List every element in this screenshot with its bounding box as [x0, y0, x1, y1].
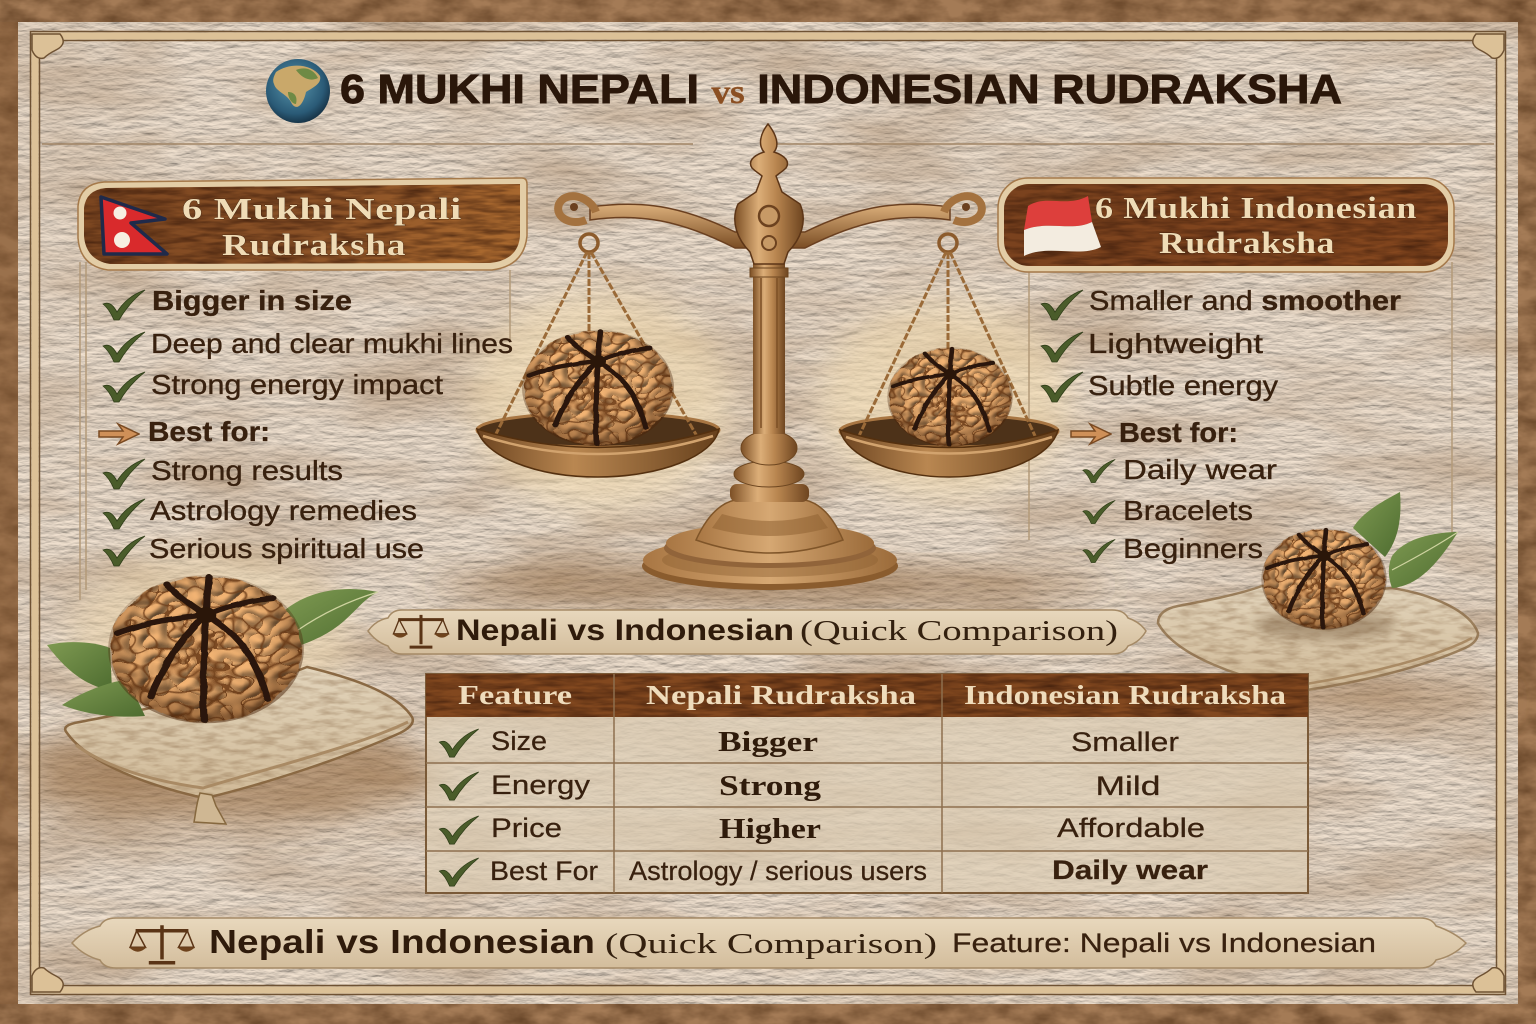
- right pan with bead: [840, 234, 1058, 477]
- row: Price: Price: [491, 813, 562, 843]
- icon: Nepal flag: [101, 197, 167, 254]
- panel: Indonesian Rudraksha: [998, 178, 1454, 564]
- row: Price: Affordable: [1057, 813, 1205, 843]
- features list: Indonesian: [1041, 285, 1401, 402]
- features list: Nepali: Deep and clear mukhi lines: [151, 328, 513, 359]
- icon: small scale: [392, 615, 450, 647]
- features list: Indonesian: Smaller and smoother: [1089, 285, 1401, 316]
- row: Size: Size: [491, 726, 547, 756]
- header banner: Indonesian: [998, 178, 1454, 272]
- best for: Indonesian: Bracelets: [1123, 495, 1253, 526]
- row: Best For: [439, 855, 1209, 886]
- row: Energy: Energy: [491, 770, 591, 800]
- row: Energy: Strong: [719, 771, 821, 802]
- row: Energy: Mild: [1096, 771, 1160, 801]
- best for: Nepali: Best for:: [148, 416, 270, 447]
- base: [642, 431, 898, 590]
- comparison heading pill: [368, 610, 1146, 654]
- icon: Indonesia flag: [1024, 196, 1101, 256]
- best for: Indonesian: [1071, 417, 1277, 564]
- footer banner: Nepali vs Indonesian: [209, 923, 595, 960]
- best for: Nepali: Serious spiritual use: [149, 533, 424, 564]
- balance scale: [477, 124, 1058, 590]
- comparison heading pill: (Quick Comparison): [800, 615, 1118, 647]
- bead on cushion: right: [1158, 492, 1478, 690]
- header banner: Nepali: [78, 178, 527, 270]
- comparison heading pill: Nepali vs Indonesian: [456, 614, 794, 647]
- leaves: [47, 589, 378, 717]
- column: [750, 262, 788, 434]
- left pan with bead: [477, 234, 719, 477]
- features list: Indonesian: Lightweight: [1088, 328, 1263, 359]
- header banner: Nepali: 6 Mukhi Nepali: [182, 191, 462, 226]
- bead on cushion: left: [47, 575, 413, 824]
- best for: Nepali: Strong results: [151, 455, 343, 486]
- row: Size: Bigger: [718, 727, 818, 758]
- footer banner: [72, 918, 1466, 968]
- features list: Indonesian: Subtle energy: [1088, 370, 1278, 401]
- header banner: Indonesian: 6 Mukhi Indonesian: [1095, 190, 1417, 225]
- icon: small scale: [129, 925, 195, 963]
- row: Best For: Best For: [490, 856, 598, 886]
- panel: Nepali Rudraksha: [78, 178, 527, 600]
- row: Price: [439, 813, 1205, 845]
- cushion: [65, 667, 413, 824]
- features list: Nepali: Bigger in size: [152, 285, 352, 316]
- table header: Indonesian Rudraksha: [964, 680, 1287, 710]
- footer banner: (Quick Comparison): [605, 928, 937, 960]
- header banner: Indonesian: Rudraksha: [1159, 225, 1335, 260]
- best for: Nepali: Astrology remedies: [150, 495, 417, 526]
- title text: 6 MUKHI NEPALI vs INDONESIAN RUDRAKSHA: [340, 66, 1342, 112]
- best for: Indonesian: Beginners: [1123, 533, 1263, 564]
- best for: Indonesian: Daily wear: [1123, 454, 1277, 485]
- features list: Nepali: Strong energy impact: [151, 369, 443, 400]
- finial and centre ornament: [735, 124, 803, 264]
- icon: globe: [266, 59, 330, 123]
- footer banner: Feature: Nepali vs Indonesian: [952, 928, 1376, 958]
- row: Size: Smaller: [1071, 727, 1179, 757]
- row: Price: Higher: [719, 814, 821, 845]
- row: Size: [439, 726, 1179, 758]
- best for: Indonesian: Best for:: [1119, 417, 1238, 448]
- table header: [426, 674, 1308, 717]
- cushion: [1158, 586, 1478, 690]
- row: Best For: Daily wear: [1052, 855, 1209, 885]
- header banner: Nepali: Rudraksha: [222, 227, 406, 262]
- table header: Feature: [458, 680, 572, 710]
- comparison table: [426, 674, 1308, 893]
- title: [266, 59, 1342, 123]
- best for: Nepali: [99, 416, 424, 566]
- leaves: [1353, 492, 1458, 588]
- row: Energy: [439, 770, 1160, 802]
- table header: Nepali Rudraksha: [646, 680, 917, 710]
- beam: [558, 196, 982, 248]
- features list: Nepali: [103, 285, 513, 402]
- row: Best For: Astrology / serious users: [629, 856, 927, 886]
